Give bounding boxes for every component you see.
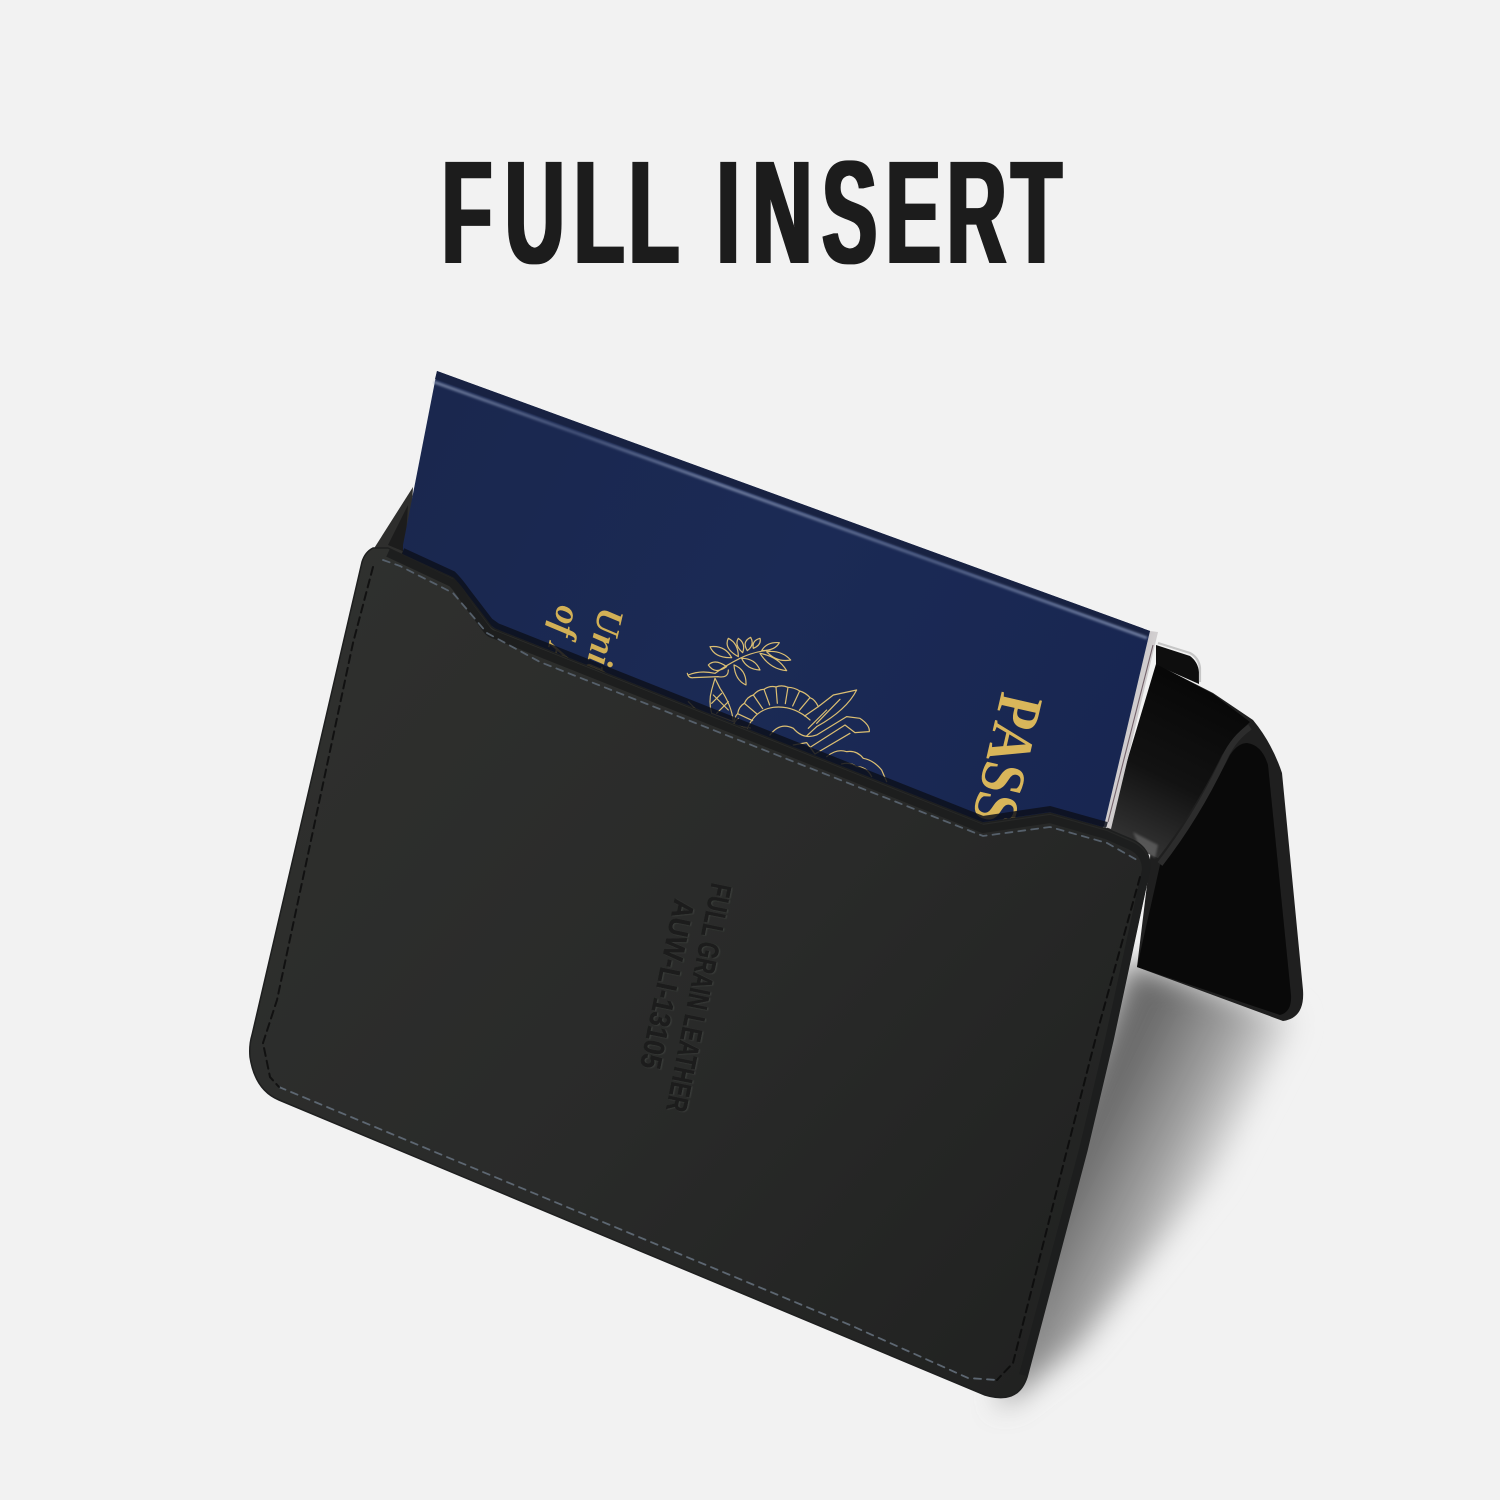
back cover of wallet [1137, 665, 1303, 1021]
country text: United States [546, 604, 631, 811]
dark spine strip [435, 371, 1150, 637]
stitching: top and bottom [263, 560, 1140, 1380]
darker upper rim [388, 553, 1146, 1375]
passport [403, 371, 1158, 979]
cover sheen [434, 382, 1147, 638]
passport page edges [1103, 631, 1158, 829]
country text: of America [511, 602, 589, 775]
embossed lettering: FULL GRAIN LEATHER [659, 881, 737, 1114]
metal clip behind passport [1156, 643, 1200, 684]
fold ridge [1160, 727, 1250, 864]
embossed lettering [633, 881, 737, 1114]
leather sliver at upper left [373, 487, 413, 558]
pocket shape [250, 548, 1150, 1398]
inner fold of wallet [1105, 664, 1250, 864]
passport cover [403, 371, 1150, 900]
shadow along pocket opening [403, 551, 1107, 825]
cast shadow under wallet [1000, 962, 1296, 1408]
embossed lettering: AUW-LI-13105 [633, 897, 699, 1071]
PASSPORT wordmark: PASSPORT [925, 687, 1057, 979]
title: FULL INSERT [442, 131, 1062, 295]
front pocket of wallet [250, 548, 1150, 1398]
gold eagle emblem [687, 637, 887, 782]
stitching: left and right [263, 567, 373, 1087]
